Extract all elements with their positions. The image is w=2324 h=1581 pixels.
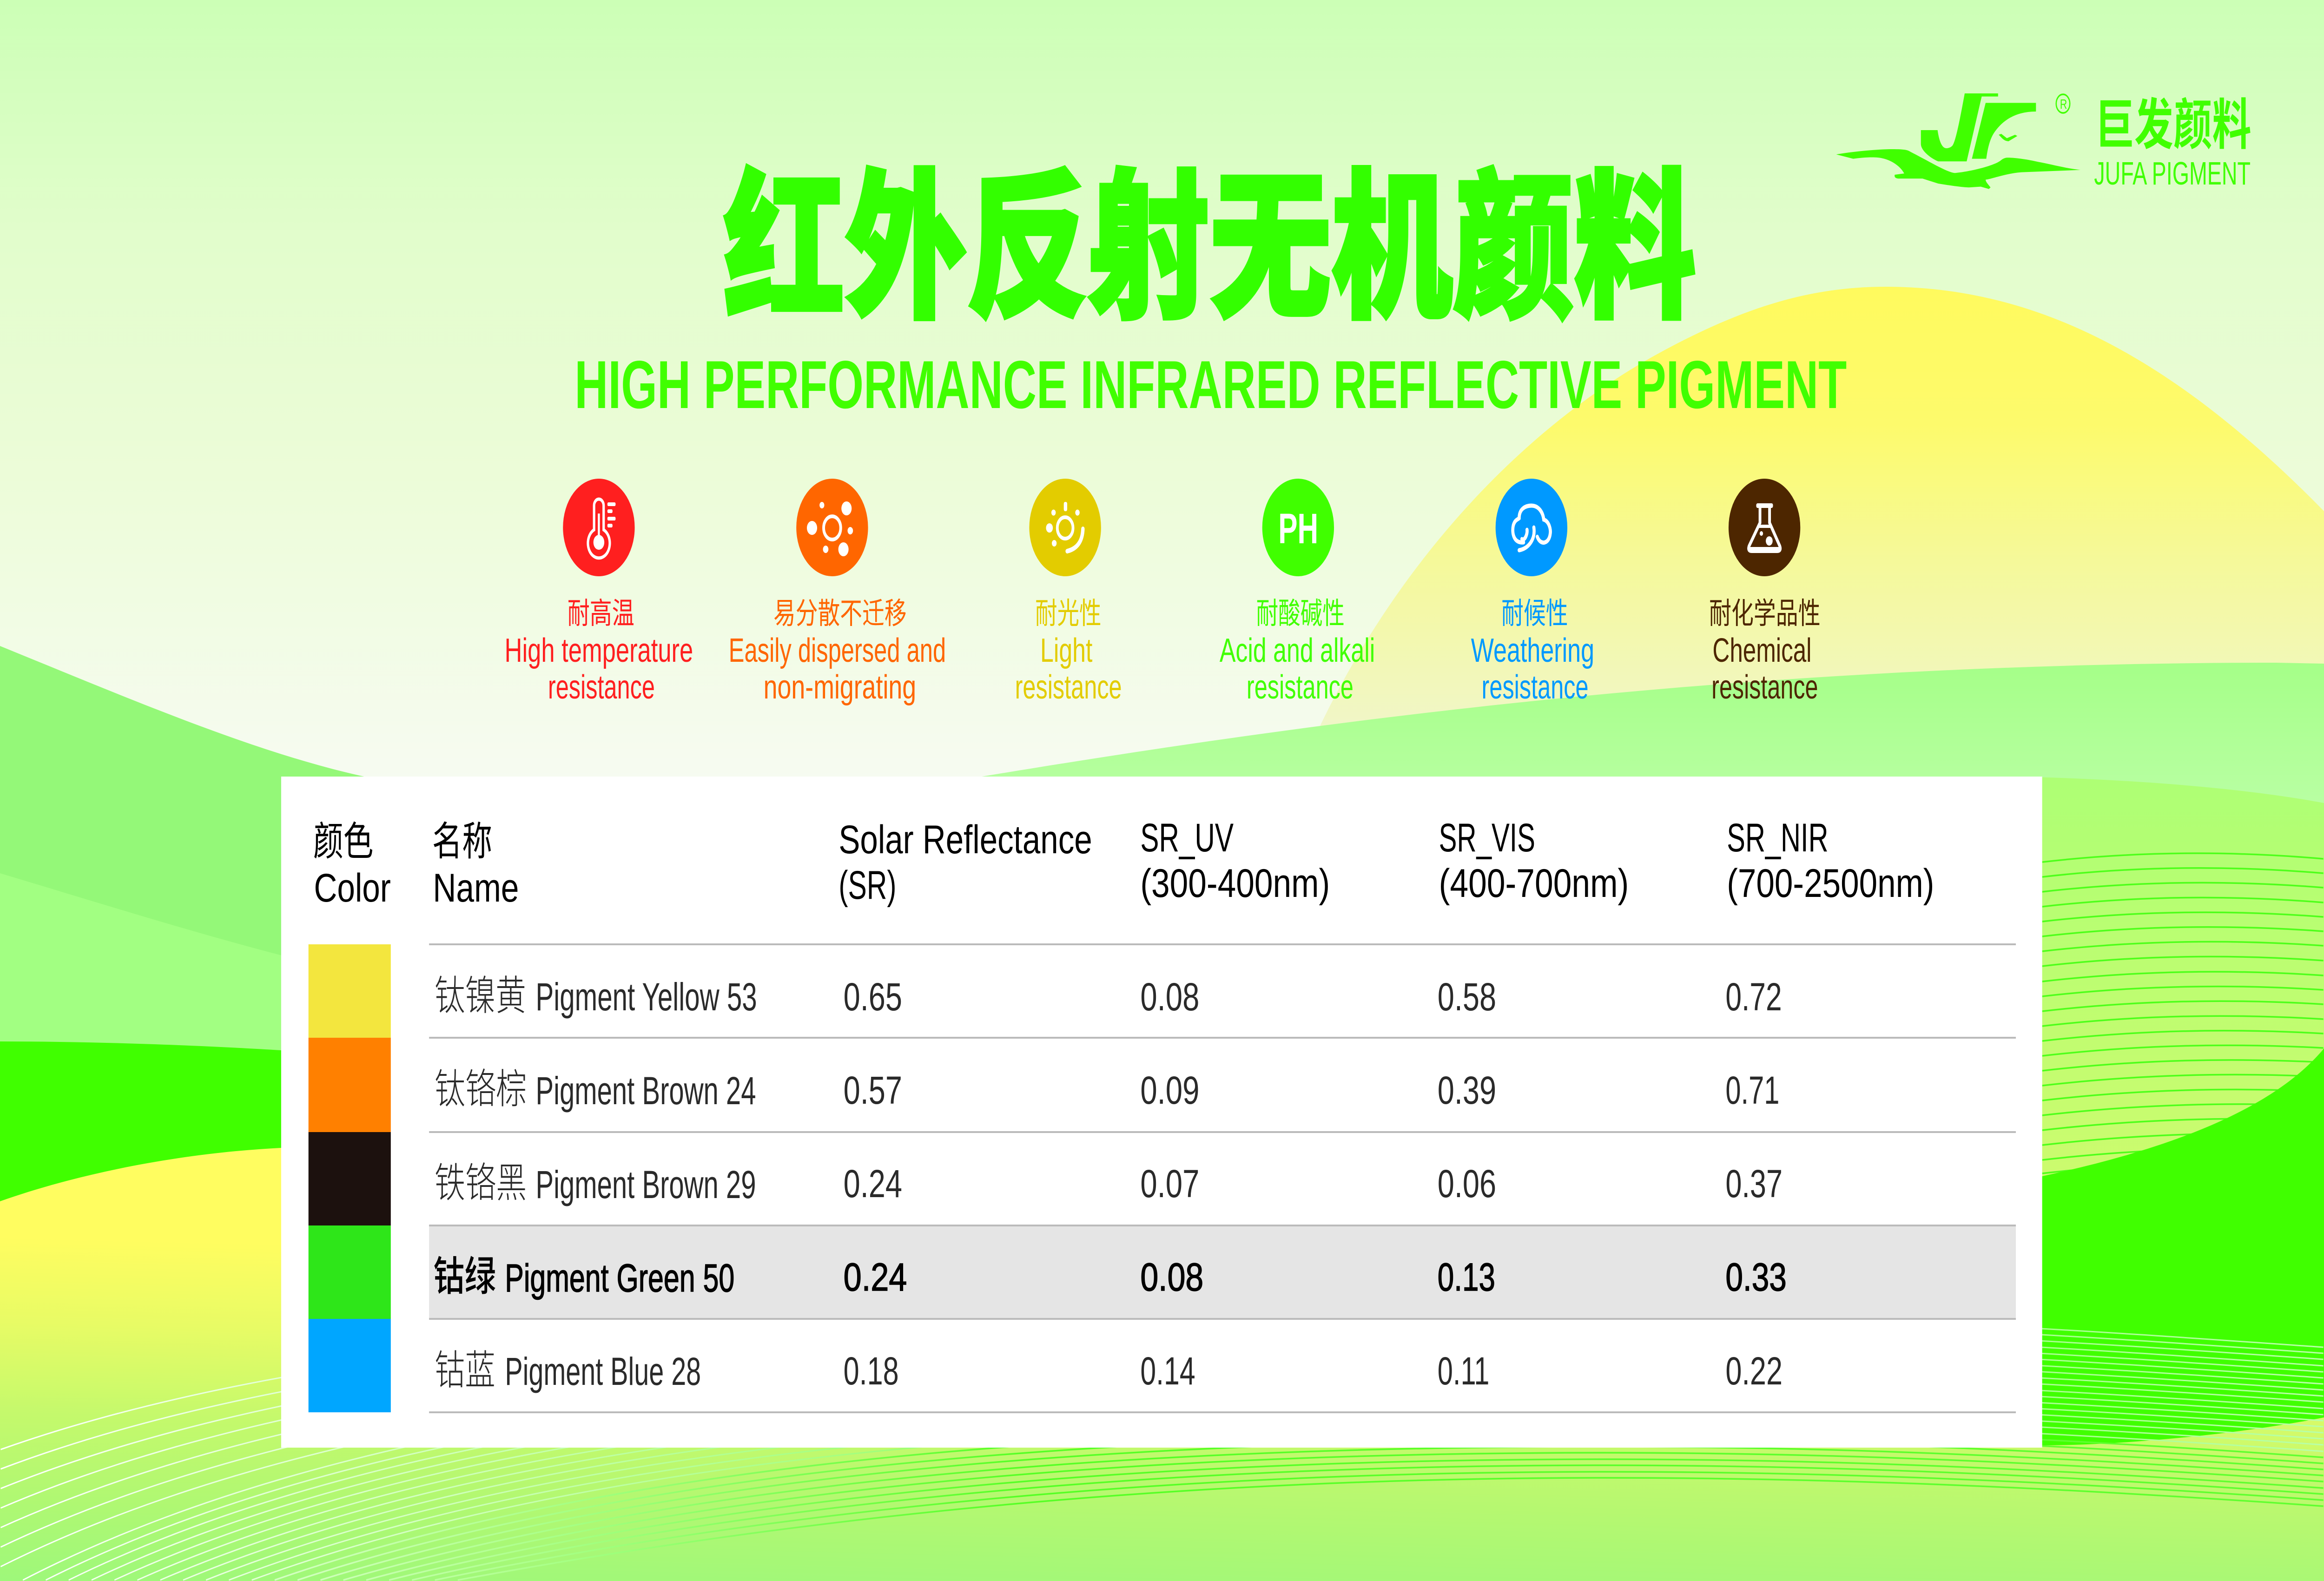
feature: light resistance: Light <box>1040 632 1093 669</box>
feature: weathering resistance: 耐候性 <box>1501 590 1568 632</box>
logo Chinese name: 巨发颜料 <box>2095 80 2251 160</box>
row: Pigment Blue 28: 0.22 <box>1725 1349 1783 1393</box>
logo mark: JF and seagull <box>1836 93 2080 189</box>
row: Pigment Green 50 (highlighted) <box>433 1244 1787 1303</box>
logo: JUFA PIGMENT <box>1836 80 2251 192</box>
feature: acid and alkali resistance: 耐酸碱性 <box>1256 590 1345 632</box>
row: Pigment Brown 29: 0.07 <box>1140 1162 1199 1206</box>
feature: acid and alkali resistance: Acid and alkali <box>1220 632 1375 669</box>
feature: weathering resistance: resistance <box>1482 669 1589 706</box>
icon: PH <box>1262 479 1334 576</box>
title: 红外反射无机颜料 <box>724 119 1696 350</box>
row: Pigment Brown 29: Pigment Brown 29 <box>535 1163 756 1206</box>
header row: Color <box>314 866 391 910</box>
feature: chemical resistance: Chemical <box>1712 632 1812 669</box>
header row: SR_VIS <box>1439 816 1535 860</box>
row: Pigment Blue 28: 钴蓝 <box>435 1337 495 1397</box>
header row: (700-2500nm) <box>1727 861 1934 905</box>
row: Pigment Brown 24 <box>435 1056 1779 1115</box>
registered mark <box>2056 94 2070 113</box>
row: Pigment Yellow 53: 0.08 <box>1140 975 1199 1019</box>
row: Pigment Green 50 (highlighted): 0.24 <box>844 1255 907 1299</box>
row: Pigment Brown 24: 0.39 <box>1438 1068 1496 1112</box>
registered mark: R <box>2060 97 2067 112</box>
header row <box>313 809 1934 910</box>
icon: flask <box>1729 479 1800 576</box>
row: Pigment Brown 24: 0.09 <box>1140 1068 1199 1112</box>
row: Pigment Brown 24: 0.71 <box>1725 1068 1779 1112</box>
header row: (SR) <box>838 863 897 907</box>
header row: SR_NIR <box>1727 816 1829 860</box>
header row: Name <box>433 866 519 910</box>
highlighted row background <box>429 1225 2016 1319</box>
header row: (300-400nm) <box>1140 861 1330 905</box>
feature: light resistance: resistance <box>1015 669 1122 706</box>
feature: easily dispersed and non-migrating: Easily dispersed and <box>729 632 946 669</box>
row: Pigment Yellow 53: 钛镍黄 <box>435 963 526 1022</box>
icon: thermometer <box>563 479 635 576</box>
row: Pigment Brown 29: 0.24 <box>844 1162 902 1206</box>
panel: pigment table <box>281 777 2042 1448</box>
icon: cloud and wind <box>1496 479 1567 576</box>
header row: SR_UV <box>1140 816 1234 860</box>
row: Pigment Green 50 (highlighted): Pigment Green 50 <box>505 1256 734 1300</box>
subtitle: HIGH PERFORMANCE INFRARED REFLECTIVE PIGMENT <box>574 347 1847 423</box>
row: Pigment Brown 29: 0.06 <box>1438 1162 1496 1206</box>
header row: 名称 <box>432 809 492 867</box>
row: Pigment Green 50 (highlighted): 0.08 <box>1140 1255 1203 1299</box>
row: Pigment Green 50 (highlighted): 钴绿 <box>433 1244 496 1303</box>
row: Pigment Brown 29: 铁铬黑 <box>435 1150 527 1209</box>
row: Pigment Brown 29 <box>435 1150 1783 1209</box>
feature: high temperature resistance: resistance <box>548 669 655 706</box>
row: Pigment Brown 24: 钛铬棕 <box>435 1056 527 1115</box>
feature: high temperature resistance: High temperature <box>505 632 693 669</box>
logo English name: JUFA PIGMENT <box>2094 155 2251 192</box>
row: Pigment Yellow 53 <box>435 963 1782 1022</box>
feature: chemical resistance: 耐化学品性 <box>1709 590 1821 632</box>
row: Pigment Brown 24: 0.57 <box>844 1068 902 1112</box>
feature: weathering resistance: Weathering <box>1471 632 1594 669</box>
color swatches <box>309 944 391 1412</box>
feature: easily dispersed and non-migrating: 易分散不迁移 <box>773 590 907 632</box>
row: Pigment Yellow 53: 0.58 <box>1438 975 1496 1019</box>
feature: weathering resistance <box>1471 479 1594 706</box>
feature: light resistance: 耐光性 <box>1035 590 1102 632</box>
row: Pigment Green 50 (highlighted): 0.13 <box>1438 1255 1495 1299</box>
feature: chemical resistance: resistance <box>1711 669 1818 706</box>
row: Pigment Green 50 (highlighted): 0.33 <box>1725 1255 1787 1299</box>
row: Pigment Yellow 53: 0.65 <box>844 975 902 1019</box>
row: Pigment Blue 28: 0.14 <box>1140 1349 1195 1393</box>
header row: 颜色 <box>313 809 373 867</box>
row: Pigment Yellow 53: 0.72 <box>1725 975 1782 1019</box>
feature: acid and alkali resistance: resistance <box>1247 669 1353 706</box>
feature: acid and alkali resistance <box>1220 479 1375 706</box>
feature: chemical resistance <box>1709 479 1821 706</box>
row: Pigment Brown 29: 0.37 <box>1725 1162 1783 1206</box>
row: Pigment Blue 28: 0.18 <box>844 1349 899 1393</box>
icon: PH: PH <box>1278 505 1318 553</box>
feature: high temperature resistance <box>505 479 693 706</box>
feature: light resistance <box>1015 479 1122 706</box>
header row: Solar Reflectance <box>838 817 1092 862</box>
row: Pigment Blue 28 <box>435 1337 1783 1397</box>
feature: easily dispersed and non-migrating <box>729 479 946 706</box>
row: Pigment Yellow 53: Pigment Yellow 53 <box>535 975 757 1019</box>
icon: dispersion dots <box>796 479 868 576</box>
row: Pigment Brown 24: Pigment Brown 24 <box>535 1069 756 1113</box>
row: Pigment Blue 28: 0.11 <box>1438 1349 1489 1393</box>
header row: (400-700nm) <box>1439 861 1629 905</box>
feature: easily dispersed and non-migrating: non-migrating <box>764 669 916 706</box>
row: Pigment Blue 28: Pigment Blue 28 <box>505 1350 701 1393</box>
icon: sun <box>1029 479 1101 576</box>
feature: high temperature resistance: 耐高温 <box>568 590 634 632</box>
